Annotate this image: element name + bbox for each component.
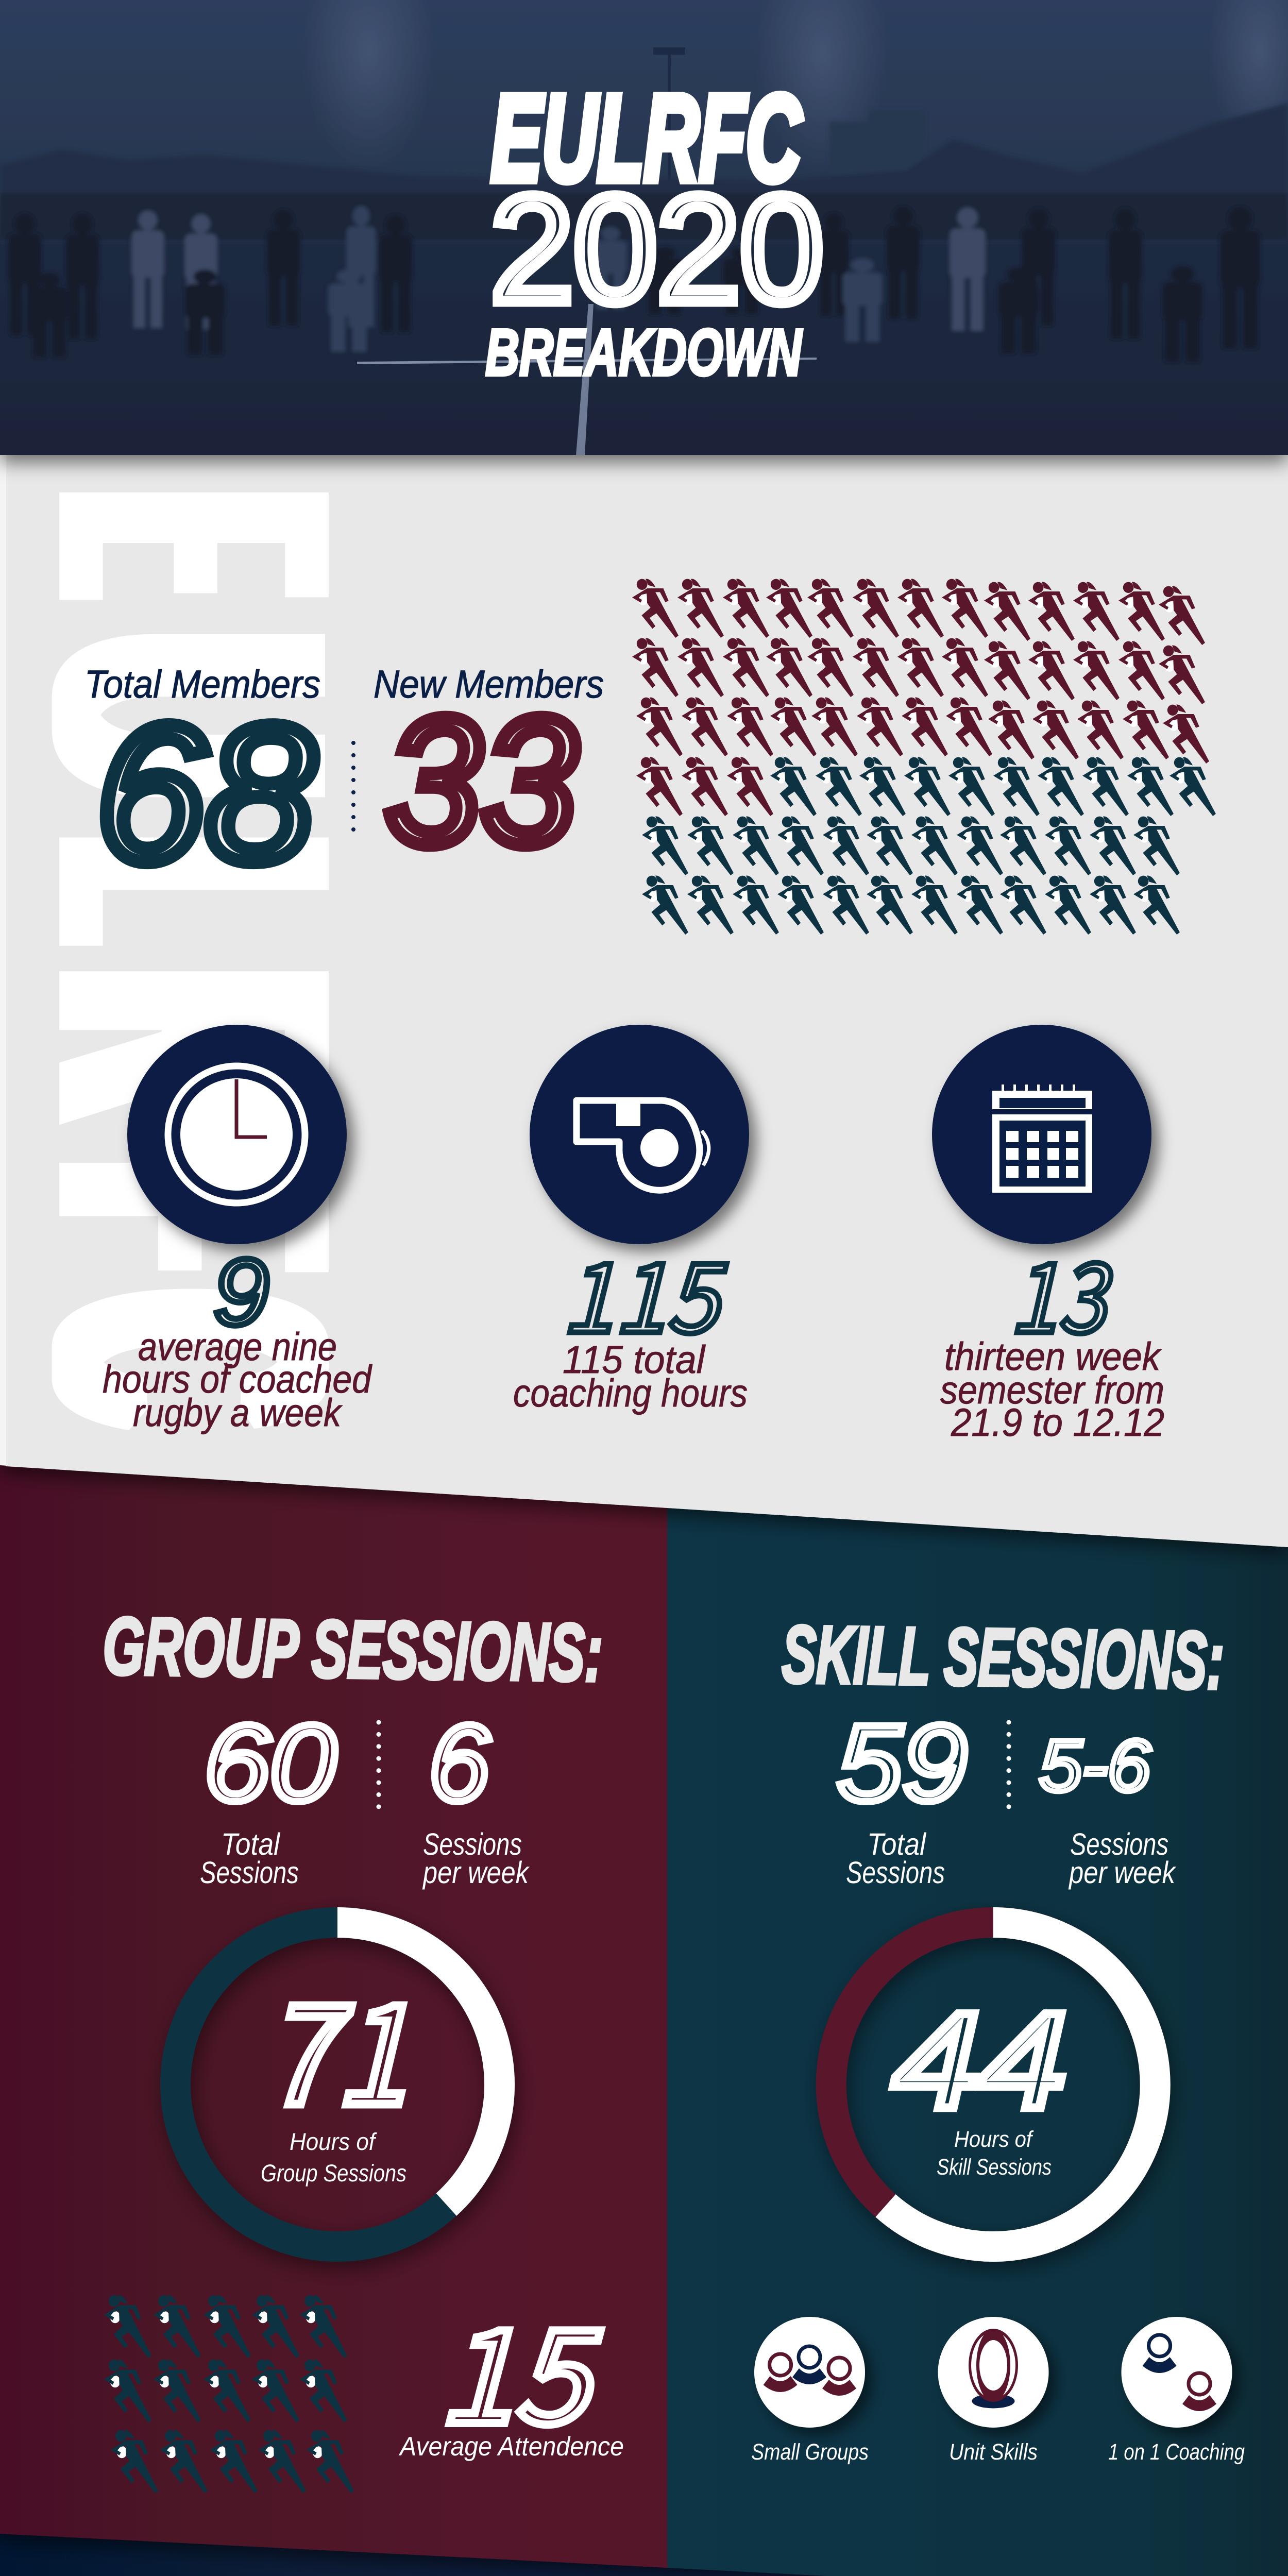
icon: small groups bbox=[751, 2317, 869, 2465]
donut chart: skill hours 44: Hours of bbox=[954, 2127, 1034, 2152]
watermark: vertical EULRFC letters bbox=[0, 499, 413, 1419]
icon: one on one coaching: 1 on 1 Coaching bbox=[1108, 2439, 1245, 2465]
stat: nine hours: average nine bbox=[138, 1325, 337, 1369]
donut chart: skill hours 44: Skill Sessions bbox=[937, 2155, 1052, 2180]
stat: group sessions per week: Sessions bbox=[423, 1827, 522, 1861]
icon: unit skills: Unit Skills bbox=[949, 2439, 1038, 2465]
icon: calendar bbox=[932, 1025, 1151, 1244]
stat: total members: 68 bbox=[96, 685, 316, 902]
stat: group total sessions: 60 bbox=[204, 1702, 336, 1824]
donut chart: group hours 71: Group Sessions bbox=[261, 2159, 406, 2187]
silhouettes of the team bbox=[8, 206, 1260, 361]
stat: new members: New Members bbox=[374, 663, 604, 706]
group and skill panels background bbox=[0, 1391, 1288, 2576]
icon: whistle bbox=[530, 1025, 749, 1244]
stat: group sessions per week: 6 bbox=[429, 1702, 490, 1824]
icon: small groups: Small Groups bbox=[751, 2439, 869, 2465]
stat: new members: 33 bbox=[385, 681, 578, 882]
passing panel background bbox=[0, 2473, 1288, 2576]
stat: nine hours bbox=[103, 1239, 372, 1435]
title: BREAKDOWN: BREAKDOWN bbox=[485, 316, 803, 389]
donut chart: group hours 71 bbox=[175, 1923, 500, 2246]
stat: 115 hours: coaching hours bbox=[513, 1371, 748, 1415]
title: 2020: 2020 bbox=[490, 165, 823, 334]
dotted separator bbox=[1007, 1722, 1011, 1819]
stat: average attendance 15 bbox=[398, 2273, 624, 2462]
donut chart: group hours 71: 71 bbox=[263, 1944, 407, 2144]
stat: group total sessions: Sessions bbox=[200, 1855, 299, 1890]
stat: group total sessions bbox=[200, 1702, 336, 1890]
stat: skill sessions per week: 5-6 bbox=[1039, 1725, 1150, 1807]
stat: 115 hours: 115 total bbox=[563, 1338, 706, 1382]
stat: skill total sessions: Sessions bbox=[846, 1855, 945, 1890]
stat: nine hours: rugby a week bbox=[133, 1391, 343, 1435]
heading: group sessions: GROUP SESSIONS: bbox=[103, 1601, 603, 1699]
pictogram: runners, members and new members bbox=[632, 579, 1216, 935]
header: team photo banner bbox=[0, 0, 1288, 455]
donut chart: group hours 71: Hours of bbox=[290, 2128, 378, 2155]
stat: average attendance 15: Average Attendence bbox=[398, 2432, 624, 2462]
stat: skill sessions per week: per week bbox=[1068, 1855, 1177, 1890]
background treeline and building bbox=[0, 103, 1288, 242]
stat: nine hours: hours of coached bbox=[103, 1358, 372, 1401]
stat: skill total sessions bbox=[837, 1702, 967, 1890]
pitch markings bbox=[357, 304, 817, 455]
icon: one on one coaching bbox=[1108, 2317, 1245, 2465]
stat: nine hours: 9 bbox=[213, 1239, 269, 1345]
stat: average attendance 15: 15 bbox=[438, 2273, 602, 2461]
stat: thirteen weeks: 13 bbox=[1009, 1221, 1113, 1360]
stat: group sessions per week bbox=[422, 1702, 530, 1890]
stat: 115 hours bbox=[513, 1221, 748, 1415]
icon: clock bbox=[127, 1025, 347, 1244]
stat: 115 hours: 115 bbox=[562, 1221, 726, 1360]
stat: skill total sessions: 59 bbox=[837, 1702, 967, 1824]
stat: group sessions per week: per week bbox=[422, 1855, 530, 1890]
stat: skill sessions per week: Sessions bbox=[1070, 1827, 1168, 1861]
dotted separator bbox=[351, 743, 355, 842]
stat: thirteen weeks: semester from bbox=[940, 1368, 1164, 1412]
stat: total members: Total Members bbox=[84, 663, 320, 706]
icon: unit skills bbox=[938, 2317, 1049, 2465]
title: EULRFC: EULRFC bbox=[491, 70, 802, 207]
stat: thirteen weeks: thirteen week bbox=[944, 1335, 1162, 1379]
donut chart: skill hours 44 bbox=[831, 1923, 1155, 2246]
membership panel background bbox=[0, 412, 1288, 1547]
stat: skill total sessions: Total bbox=[867, 1827, 926, 1861]
dotted separator bbox=[376, 1722, 381, 1819]
donut chart: skill hours 44: 44 bbox=[893, 1985, 1067, 2137]
stat: thirteen weeks bbox=[940, 1221, 1164, 1445]
stat: thirteen weeks: 21.9 to 12.12 bbox=[951, 1401, 1164, 1445]
floodlight glows bbox=[301, 0, 1288, 196]
pictogram: average attendance runners bbox=[104, 2295, 354, 2493]
stat: skill sessions per week bbox=[1039, 1725, 1177, 1890]
stat: group total sessions: Total bbox=[221, 1827, 280, 1861]
